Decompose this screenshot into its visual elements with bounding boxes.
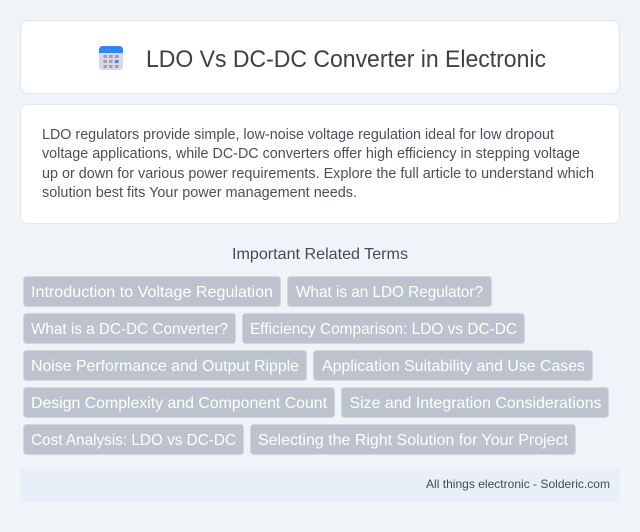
tag: introduction: Introduction to Voltage Regulation	[31, 284, 273, 301]
footer text: All things electronic - Solderic.com	[426, 477, 610, 491]
tag: application	[314, 350, 592, 380]
heading: related terms: Important Related Terms	[232, 246, 408, 263]
icon: calendar	[99, 46, 123, 70]
tag: noise: Noise Performance and Output Ripple	[31, 358, 299, 375]
tag: DC-DC converter: What is a DC-DC Converter?	[31, 321, 228, 338]
panel: header	[20, 20, 620, 94]
text block: description: voltage applications, while DC-DC converters offer high efficiency in stepping voltage	[42, 146, 580, 162]
tag: introduction	[24, 276, 280, 306]
title: LDO Vs DC-DC Converter in Electronic	[146, 46, 546, 73]
text block: description: LDO regulators provide simple, low-noise voltage regulation ideal for low dropout	[42, 127, 554, 143]
tag: efficiency	[242, 314, 524, 344]
tag: design complexity: Design Complexity and Component Count	[31, 395, 328, 412]
tag: cost: Cost Analysis: LDO vs DC-DC	[31, 432, 236, 449]
tag: cost	[24, 424, 244, 454]
tag: size	[342, 388, 608, 418]
tag: selecting	[250, 424, 576, 454]
tag: application: Application Suitability and Use Cases	[322, 358, 585, 375]
tag: design complexity	[24, 388, 334, 418]
tag: noise	[24, 350, 306, 380]
text block: description	[42, 127, 594, 201]
tag: LDO regulator	[288, 276, 492, 306]
tag list	[24, 276, 608, 454]
footer	[20, 468, 620, 502]
tag: size: Size and Integration Considerations	[350, 395, 602, 412]
text block: description: solution best fits Your power management needs.	[42, 185, 357, 201]
tag: DC-DC converter	[24, 314, 236, 344]
tag: selecting: Selecting the Right Solution for Your Project	[258, 432, 569, 449]
tag: LDO regulator: What is an LDO Regulator?	[296, 284, 483, 301]
tag: efficiency: Efficiency Comparison: LDO vs DC-DC	[250, 321, 517, 338]
panel: description	[20, 104, 620, 224]
text block: description: up or down for various power requirements. Explore the full article to understand which	[42, 166, 594, 182]
